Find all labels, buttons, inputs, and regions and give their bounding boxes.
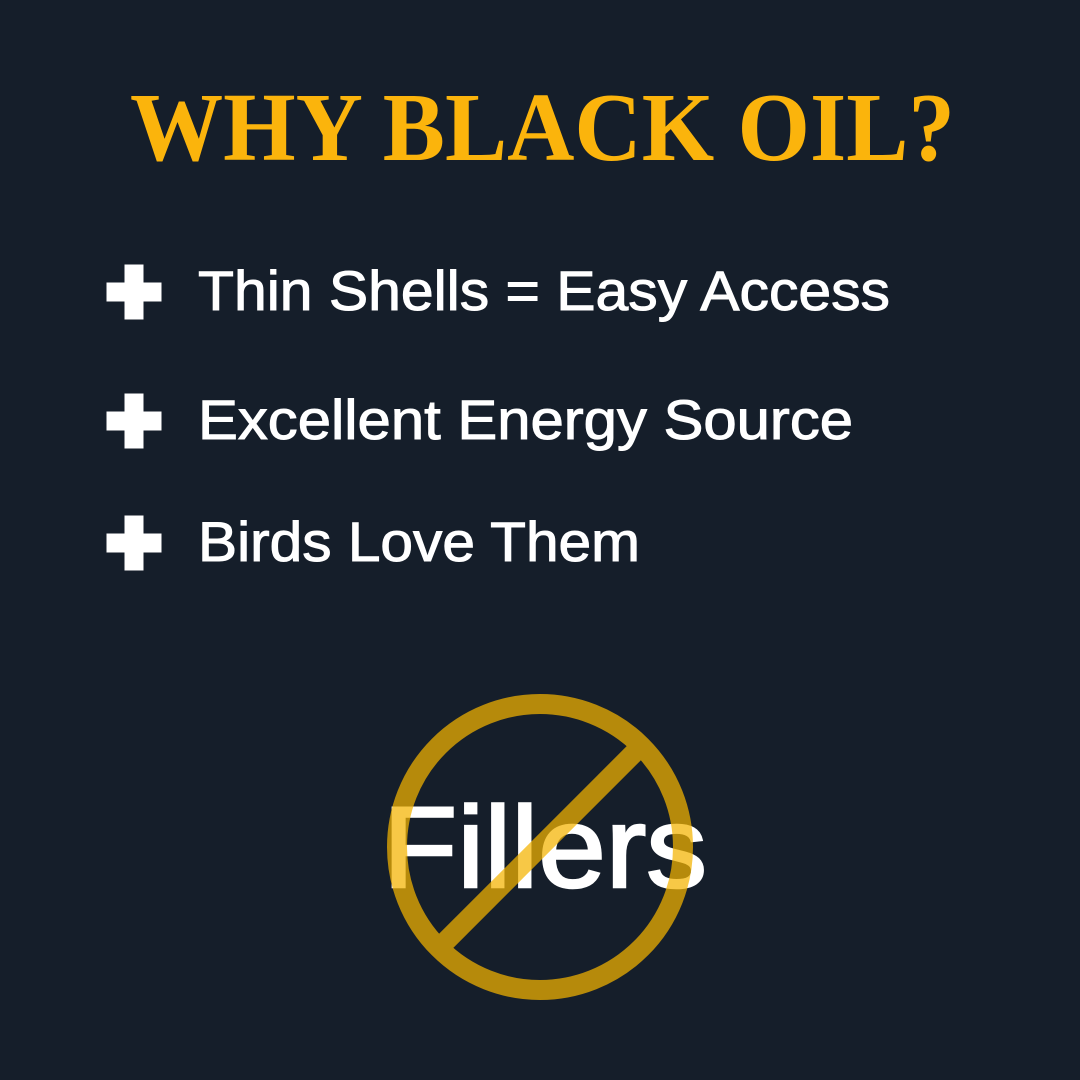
icon: prohibition sign bbox=[397, 704, 683, 990]
fillers text: Fillers bbox=[383, 784, 707, 912]
icon: plus 1 bbox=[107, 265, 161, 319]
bullet text 2: Excellent Energy Source bbox=[198, 388, 853, 451]
bullet list bbox=[107, 259, 890, 573]
bullet text 3: Birds Love Them bbox=[198, 510, 640, 573]
icon: plus 2 bbox=[107, 394, 161, 448]
title: WHY BLACK OIL? bbox=[130, 74, 955, 182]
no fillers sign bbox=[383, 704, 707, 990]
bullet text 1: Thin Shells = Easy Access bbox=[198, 259, 890, 322]
icon: plus 3 bbox=[107, 516, 161, 570]
